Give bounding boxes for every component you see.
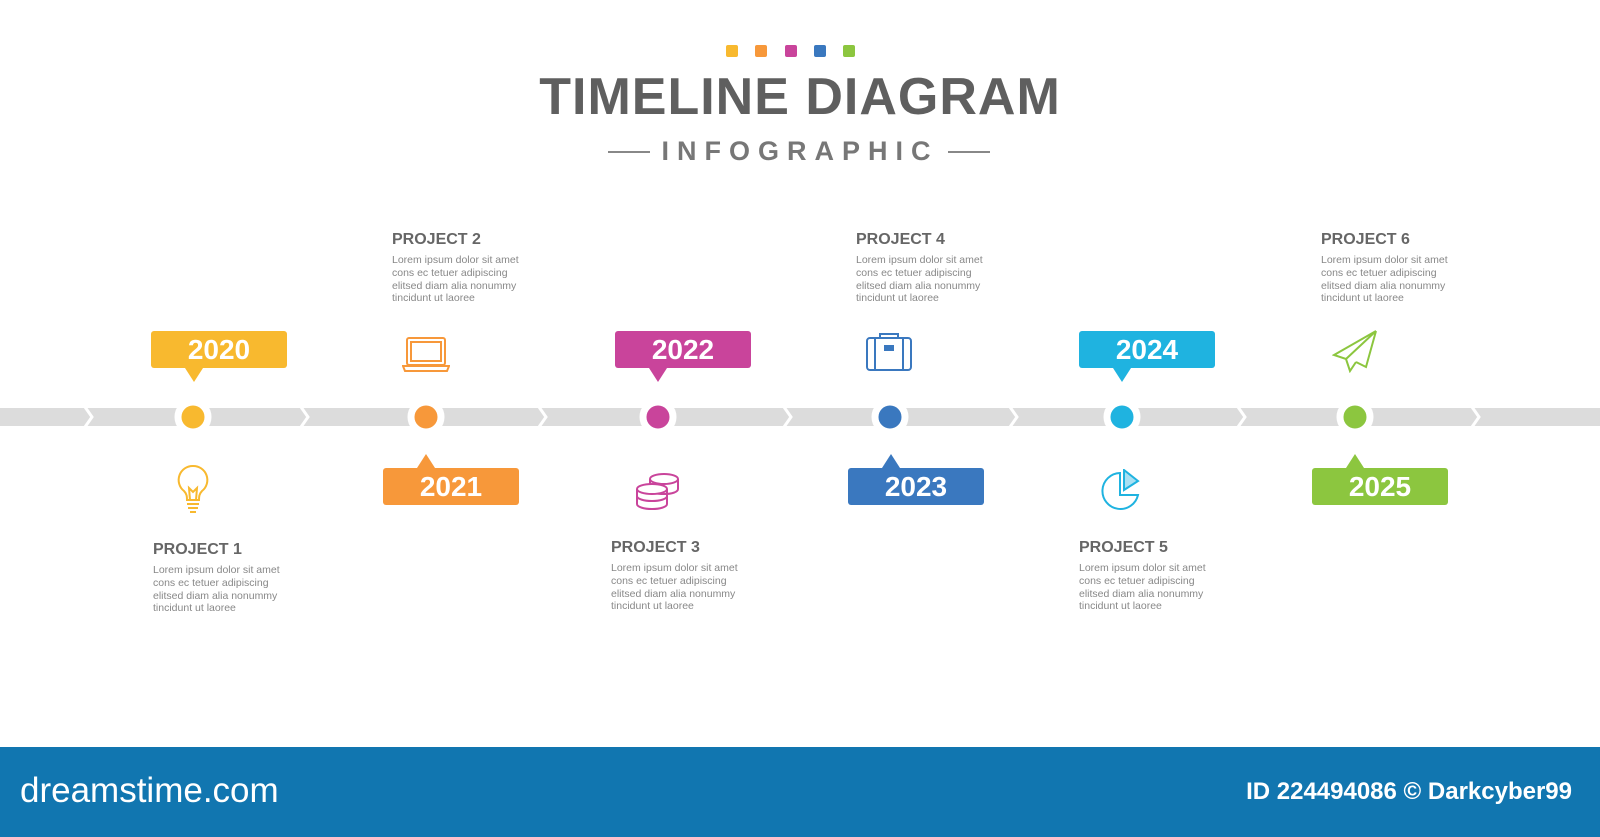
year 2022 [615, 331, 751, 368]
year 2023: 2023 [885, 471, 947, 502]
project 6 [1321, 231, 1448, 304]
title: TIMELINE DIAGRAM [539, 68, 1061, 126]
project 3: tincidunt ut laoree [611, 600, 694, 612]
project 5: Lorem ipsum dolor sit amet [1079, 562, 1206, 574]
year 2025: 2025 [1349, 471, 1411, 502]
project 3: cons ec tetuer adipiscing [611, 575, 727, 587]
project 5: cons ec tetuer adipiscing [1079, 575, 1195, 587]
project 5: PROJECT 5 [1079, 539, 1168, 556]
timeline track [0, 406, 1600, 428]
project 6: Lorem ipsum dolor sit amet [1321, 254, 1448, 266]
icon: briefcase [866, 333, 912, 371]
year 2024 [1079, 331, 1215, 368]
project 2: cons ec tetuer adipiscing [392, 267, 508, 279]
year 2021 [383, 468, 519, 505]
project 5: elitsed diam alia nonummy [1079, 588, 1203, 600]
icon: pie chart [1101, 469, 1140, 510]
project 2 [392, 231, 519, 304]
year 2020: 2020 [188, 334, 250, 365]
project 1: cons ec tetuer adipiscing [153, 577, 269, 589]
project 4 [856, 231, 983, 304]
project 3: Lorem ipsum dolor sit amet [611, 562, 738, 574]
project 4: PROJECT 4 [856, 231, 945, 248]
project 4: Lorem ipsum dolor sit amet [856, 254, 983, 266]
project 2: Lorem ipsum dolor sit amet [392, 254, 519, 266]
project 1 [153, 541, 280, 614]
icon: coins [636, 473, 679, 510]
footer [0, 747, 1600, 837]
footer id: ID 224494086 © Darkcyber99 [1246, 778, 1572, 805]
year 2021: 2021 [420, 471, 482, 502]
project 2: tincidunt ut laoree [392, 292, 475, 304]
project 3 [611, 539, 738, 612]
project 4: tincidunt ut laoree [856, 292, 939, 304]
project 2: PROJECT 2 [392, 231, 481, 248]
project 3: PROJECT 3 [611, 539, 700, 556]
project 4: elitsed diam alia nonummy [856, 280, 980, 292]
icon: bulb [178, 465, 208, 513]
year 2022: 2022 [652, 334, 714, 365]
project 5 [1079, 539, 1206, 612]
project 4: cons ec tetuer adipiscing [856, 267, 972, 279]
project 6: elitsed diam alia nonummy [1321, 280, 1445, 292]
project 2: elitsed diam alia nonummy [392, 280, 516, 292]
project 6: PROJECT 6 [1321, 231, 1410, 248]
project 1: Lorem ipsum dolor sit amet [153, 564, 280, 576]
project 5: tincidunt ut laoree [1079, 600, 1162, 612]
project 6: tincidunt ut laoree [1321, 292, 1404, 304]
year 2025 [1312, 468, 1448, 505]
project 1: PROJECT 1 [153, 541, 242, 558]
year 2020 [151, 331, 287, 368]
icon: paper plane [1332, 330, 1377, 373]
icon: laptop [402, 337, 450, 372]
project 1: elitsed diam alia nonummy [153, 590, 277, 602]
footer brand: dreamstime.com [20, 771, 279, 810]
subtitle: INFOGRAPHIC [662, 136, 938, 166]
decorative squares [726, 45, 855, 57]
project 3: elitsed diam alia nonummy [611, 588, 735, 600]
year 2023 [848, 468, 984, 505]
project 1: tincidunt ut laoree [153, 602, 236, 614]
year 2024: 2024 [1116, 334, 1178, 365]
project 6: cons ec tetuer adipiscing [1321, 267, 1437, 279]
